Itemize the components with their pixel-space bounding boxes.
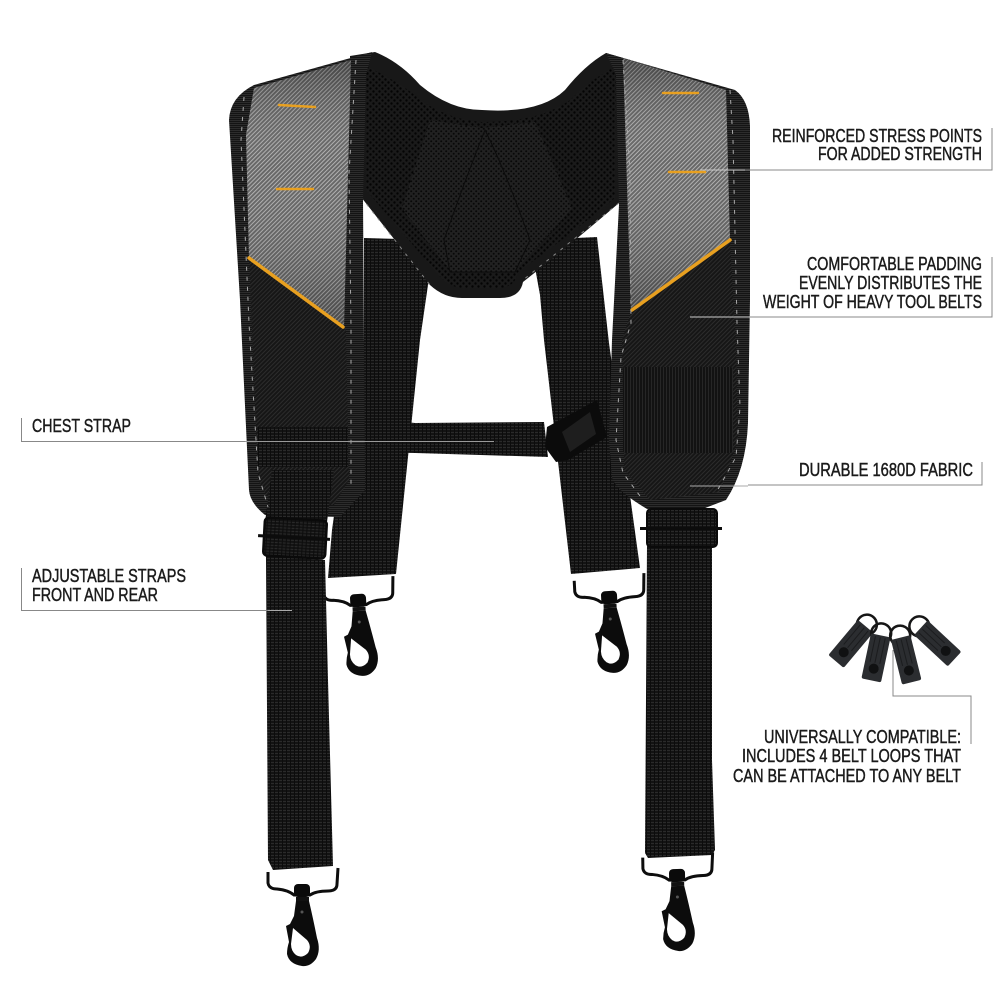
neck center fan — [444, 130, 530, 272]
front strap left — [266, 556, 333, 870]
rear hook right — [574, 573, 649, 675]
belt loop 2 — [861, 622, 893, 682]
neck pad — [350, 52, 630, 298]
belt loop 4 — [905, 612, 961, 666]
neck mesh — [366, 66, 616, 288]
right lower fabric — [622, 240, 738, 500]
left strap top — [265, 470, 334, 522]
callout: adjustable straps — [22, 566, 292, 610]
belt loop 3 — [888, 623, 921, 685]
chest buckle — [545, 400, 607, 462]
right pocket — [623, 367, 733, 453]
right shoulder pad — [606, 53, 750, 510]
callout: chest strap: CHEST STRAP — [32, 416, 131, 436]
belt loop 1 — [828, 611, 881, 668]
front strap right — [645, 545, 715, 858]
callout: adjustable straps: ADJUSTABLE STRAPS — [32, 566, 186, 586]
callout: chest strap — [22, 416, 494, 442]
callout: comfortable padding — [690, 254, 992, 317]
callout: durable fabric — [690, 460, 982, 486]
rear hook left — [323, 576, 398, 678]
right grey panel — [623, 58, 730, 312]
suspenders product — [229, 52, 750, 966]
left lower fabric — [249, 258, 349, 505]
callout: reinforced stress points — [700, 126, 992, 170]
belt loops — [828, 611, 961, 685]
left shoulder pad — [229, 52, 372, 522]
right slider buckle — [640, 509, 722, 547]
callout: adjustable straps: FRONT AND REAR — [32, 585, 158, 605]
right yellow stitching — [632, 93, 730, 310]
rear strap left — [328, 238, 440, 578]
front hook right — [643, 852, 714, 952]
callout: universally compatible — [733, 650, 971, 786]
left chest patch — [258, 427, 348, 467]
rear strap right — [530, 237, 640, 574]
chest strap — [366, 400, 607, 462]
left slider buckle — [257, 517, 331, 559]
left yellow stitching — [249, 105, 343, 327]
front hook left — [268, 868, 338, 966]
left grey panel — [246, 60, 351, 328]
neck center quilting — [402, 120, 572, 270]
